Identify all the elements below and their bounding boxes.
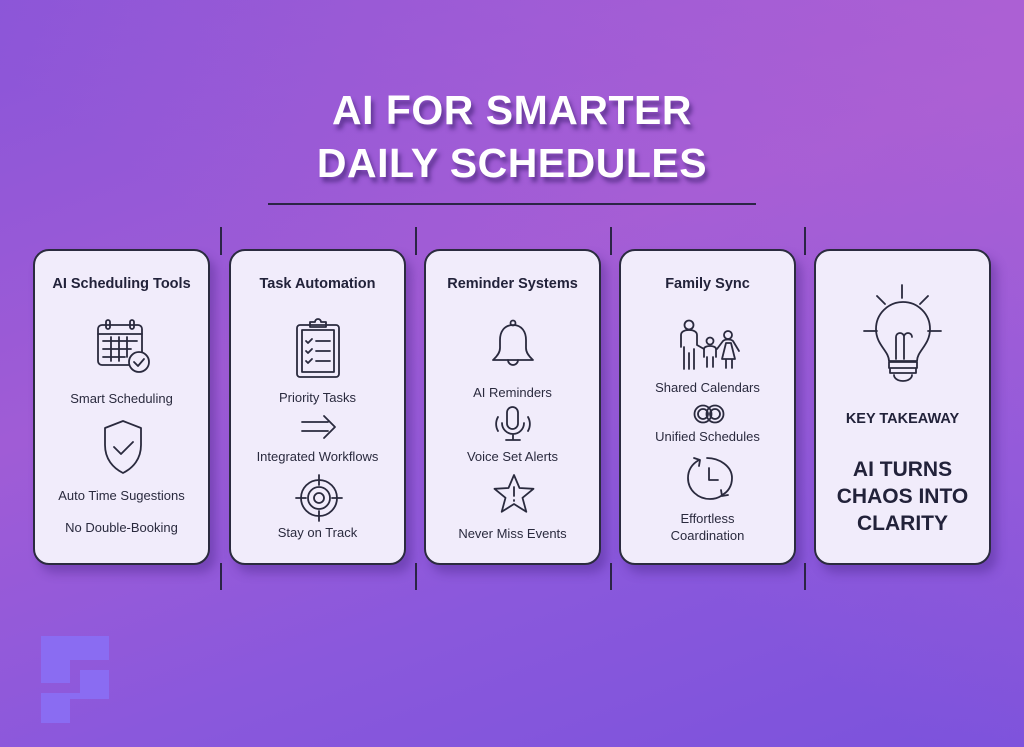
panel: Task Automation (229, 249, 406, 565)
icon: star (494, 474, 534, 513)
panel: Reminder Systems (424, 249, 601, 565)
text: AI Reminders (473, 385, 552, 400)
logo (41, 636, 109, 723)
heading: Reminder Systems (447, 276, 578, 292)
text: Shared Calendars (655, 380, 760, 395)
icon: arrow (301, 415, 336, 439)
text: Auto Time Sugestions (58, 488, 185, 503)
text (671, 511, 744, 543)
icon: rings (694, 404, 724, 424)
callout text: CHAOS INTO (837, 485, 968, 508)
text: Effortless (681, 511, 734, 526)
callout text: CLARITY (857, 512, 948, 535)
heading: Family Sync (665, 276, 750, 292)
icon: clipboard (296, 318, 340, 378)
text: Unified Schedules (655, 429, 760, 444)
heading: KEY TAKEAWAY (846, 411, 959, 427)
icon: bell (492, 320, 534, 366)
icon: microphone (495, 406, 531, 441)
text: Never Miss Events (458, 526, 567, 541)
icon: target (295, 474, 343, 522)
title: DAILY SCHEDULES (317, 140, 707, 186)
title: AI FOR SMARTER (332, 87, 692, 133)
panel: Family Sync (619, 249, 796, 565)
panel: Key Takeaway (814, 249, 991, 565)
icon: family (680, 320, 740, 370)
text: No Double-Booking (65, 520, 178, 535)
text: Coardination (671, 528, 744, 543)
text: Priority Tasks (279, 390, 356, 405)
text: Voice Set Alerts (467, 449, 558, 464)
callout text (837, 458, 968, 535)
icon: shield (104, 420, 142, 474)
heading: Task Automation (259, 276, 376, 292)
panel: AI Scheduling Tools (33, 249, 210, 565)
icon: calendar (97, 319, 150, 373)
text: Stay on Track (278, 525, 357, 540)
icon: clock cycle (687, 457, 733, 500)
icon: lightbulb (863, 284, 942, 382)
callout text: AI TURNS (853, 458, 952, 481)
text: Integrated Workflows (257, 449, 378, 464)
title (317, 87, 710, 186)
heading: AI Scheduling Tools (52, 276, 191, 292)
text: Smart Scheduling (70, 391, 173, 406)
